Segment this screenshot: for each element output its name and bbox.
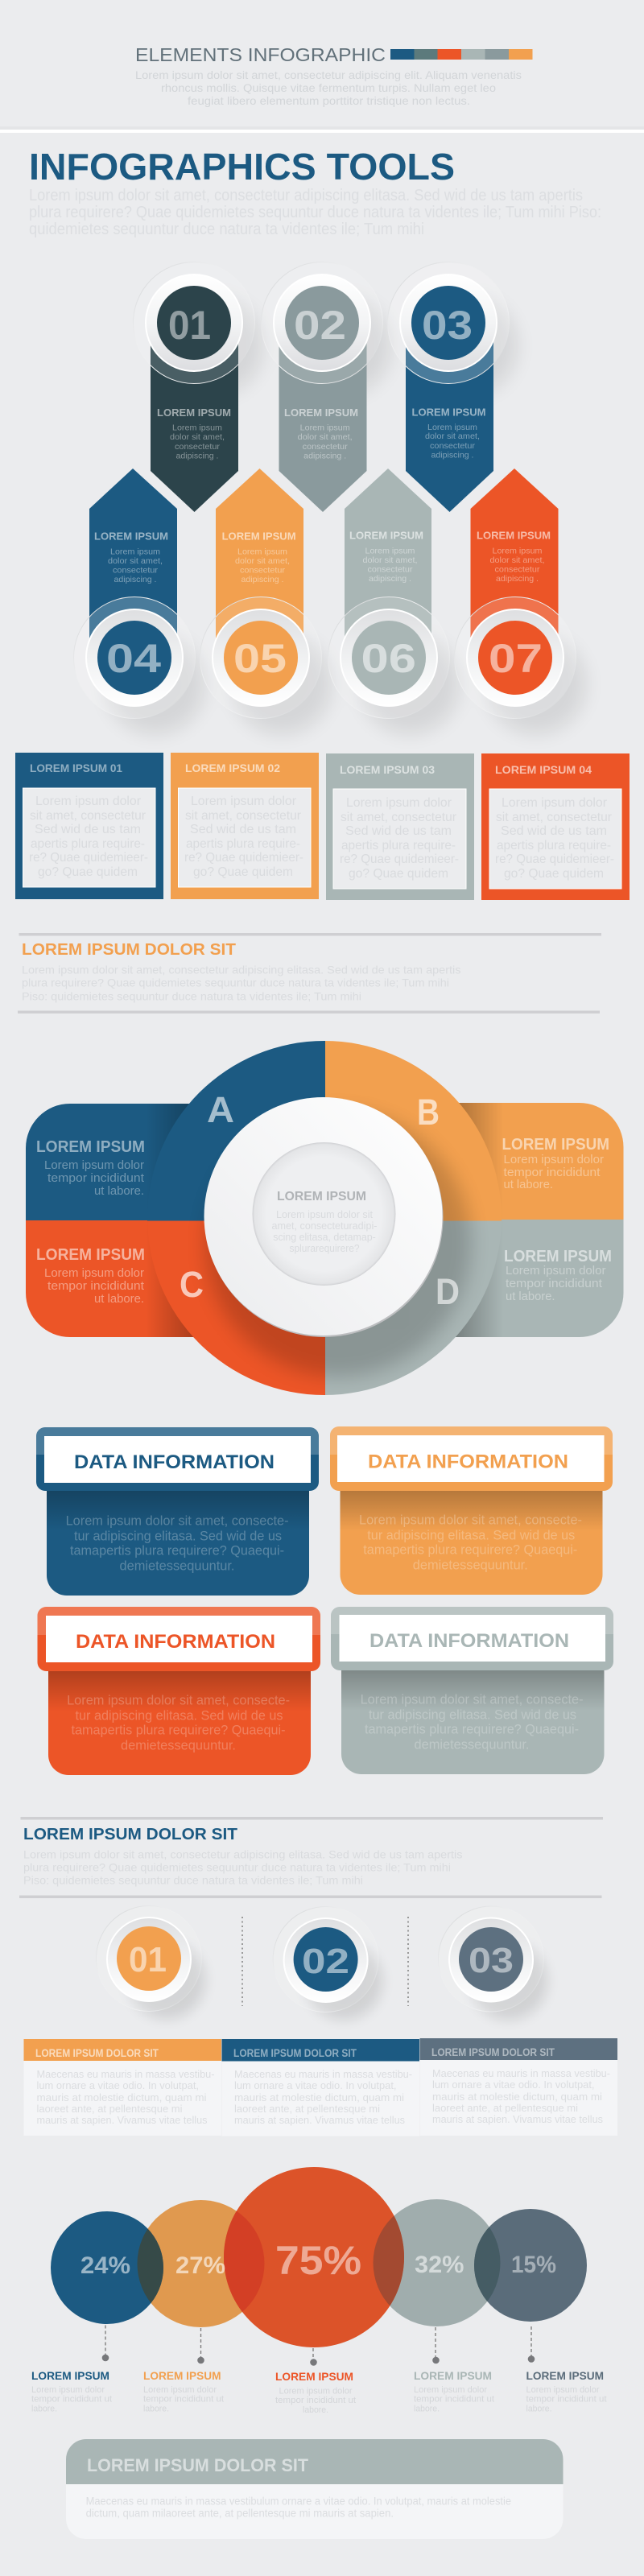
grey panel text xyxy=(504,1248,612,1303)
quadrant letters: A xyxy=(207,1089,234,1130)
chart: seven numbered ribbons xyxy=(74,262,586,734)
card 04: re? Quae quidemieer- xyxy=(495,852,614,866)
quadrant letters: C xyxy=(180,1264,204,1305)
data card: red: tamapertis plura requirere? Quaequi- xyxy=(71,1723,285,1737)
blue panel text: ut labore. xyxy=(94,1185,144,1198)
data card: orange: Lorem ipsum dolor sit amet, consecte- xyxy=(359,1512,582,1528)
card 04: go? Quae quidem xyxy=(504,867,604,881)
label 24%: Lorem ipsum dolor xyxy=(31,2385,105,2395)
card 01: LOREM IPSUM 01 xyxy=(30,762,122,774)
orange section paragraph: plura requirere? Quae quidemietes sequuntur duce natura ta videntes ile; Tum mihi xyxy=(22,976,449,989)
circle 02 xyxy=(273,1906,378,2013)
column 1 xyxy=(24,2039,221,2136)
column 2: Maecenas eu mauris in massa vestibu- xyxy=(234,2068,412,2080)
blue section paragraph: Lorem ipsum dolor sit amet, consectetur adipiscing elitasa. Sed wid de us tam apertis xyxy=(23,1848,462,1861)
column 3: mauris at sapien. Vivamus vitae tellus xyxy=(432,2113,603,2125)
label 24%: LOREM IPSUM xyxy=(31,2369,109,2382)
callout text: Maecenas eu mauris in massa vestibulum ornare a vitae odio. In volutpat, mauris at molestie xyxy=(86,2496,511,2507)
data card: red: demietessequuntur. xyxy=(121,1737,236,1753)
card 04: apertis plura require- xyxy=(497,839,611,852)
ribbon 04: 04 xyxy=(106,636,161,681)
ribbon 05: Lorem ipsum xyxy=(237,547,287,557)
intro paragraph xyxy=(29,187,601,238)
label 32%: tempor incididunt ut xyxy=(414,2394,494,2404)
card 03: LOREM IPSUM 03 xyxy=(340,763,435,776)
orange section paragraph: Piso: quidemietes sequuntur duce natura ta videntes ile; Tum mihi xyxy=(22,990,361,1003)
card 01 xyxy=(15,753,163,899)
data card: orange: tur adipiscing elitasa. Sed wid de us xyxy=(367,1528,575,1542)
data card: orange xyxy=(330,1426,613,1595)
label 24%: labore. xyxy=(31,2404,57,2413)
centre disc: Lorem ipsum dolor sit xyxy=(276,1209,374,1220)
label 27%: Lorem ipsum dolor xyxy=(143,2385,217,2395)
intro paragraph: Lorem ipsum dolor sit amet, consectetur adipiscing elitasa. Sed wid de us tam apertis xyxy=(29,187,583,204)
blue section paragraph: plura requirere? Quae quidemietes sequuntur duce natura ta videntes ile; Tum mihi xyxy=(23,1861,451,1874)
ribbon 02: Lorem ipsum xyxy=(300,423,350,433)
data card: blue: tamapertis plura requirere? Quaequi- xyxy=(70,1542,284,1558)
ribbon 04: dolor sit amet, xyxy=(108,556,163,566)
blue section paragraph xyxy=(23,1848,462,1887)
grey panel text: LOREM IPSUM xyxy=(504,1248,612,1265)
table: three columns xyxy=(24,2038,617,2136)
label 15% xyxy=(526,2369,607,2413)
ribbon 03: adipiscing . xyxy=(431,451,473,460)
card 01: go? Quae quidem xyxy=(38,865,138,879)
blue section paragraph: Piso: quidemietes sequuntur duce natura ta videntes ile; Tum mihi xyxy=(23,1874,363,1887)
ribbon 02: 02 xyxy=(294,303,346,348)
panel: four lorem ipsum cards xyxy=(15,753,630,900)
label 75%: LOREM IPSUM xyxy=(275,2370,353,2383)
percentage values: 32% xyxy=(415,2252,464,2278)
quadrant letters xyxy=(180,1089,460,1312)
ribbon 03: consectetur xyxy=(430,441,476,451)
circle 03 xyxy=(438,1906,544,2012)
data card: red: DATA INFORMATION xyxy=(76,1631,275,1653)
label 75% xyxy=(275,2370,356,2415)
ribbon 07: LOREM IPSUM xyxy=(477,530,551,541)
orange section paragraph: Lorem ipsum dolor sit amet, consectetur adipiscing elitasa. Sed wid de us tam apertis xyxy=(22,963,460,976)
card 02: LOREM IPSUM 02 xyxy=(185,762,280,774)
card 02: apertis plura require- xyxy=(186,837,300,851)
colour swatch strip xyxy=(390,49,533,60)
ribbon 05: dolor sit amet, xyxy=(235,556,290,566)
ribbon 03: Lorem ipsum xyxy=(427,423,477,432)
card 01: Lorem ipsum dolor xyxy=(35,795,142,808)
data card: blue: Lorem ipsum dolor sit amet, consecte- xyxy=(66,1513,289,1528)
data card: blue: DATA INFORMATION xyxy=(74,1451,275,1473)
orange panel text: Lorem ipsum dolor xyxy=(504,1154,604,1166)
ribbon 06: consectetur xyxy=(367,565,413,575)
red panel text xyxy=(36,1246,145,1306)
percentage values: 24% xyxy=(80,2252,130,2279)
ribbon 06: adipiscing . xyxy=(369,574,411,584)
ribbon 04: Lorem ipsum xyxy=(110,547,160,557)
ribbon 05 xyxy=(200,469,322,718)
centre disc xyxy=(204,1097,443,1337)
red panel text: tempor incididunt xyxy=(47,1280,144,1293)
label 32% xyxy=(414,2369,494,2413)
orange panel text: tempor incididunt xyxy=(504,1166,601,1179)
leader lines xyxy=(102,2325,535,2366)
column 3: laoreet ante, at pellentesque mi xyxy=(432,2102,578,2114)
centre disc: amet, consecteturadipi- xyxy=(272,1220,377,1232)
section heading: orange xyxy=(22,941,460,1003)
red panel text: LOREM IPSUM xyxy=(36,1246,145,1264)
data card: orange: DATA INFORMATION xyxy=(368,1451,568,1473)
ribbon 03: LOREM IPSUM xyxy=(412,406,486,419)
ribbon 03 xyxy=(388,262,509,512)
orange panel text xyxy=(502,1136,609,1191)
percentage values xyxy=(80,2238,556,2283)
card 02 xyxy=(171,753,319,899)
callout text xyxy=(86,2496,511,2520)
section heading: blue xyxy=(23,1826,462,1887)
data card: blue xyxy=(36,1427,319,1596)
ribbon 02 xyxy=(261,262,383,512)
numbered circles row xyxy=(97,1906,547,2020)
column 2: lum ornare a vitae odio. In volutpat, xyxy=(234,2079,396,2091)
side panel: orange xyxy=(402,1103,623,1220)
ribbon 06: LOREM IPSUM xyxy=(349,530,423,541)
ribbon 04 xyxy=(74,469,195,718)
column 3 xyxy=(420,2038,617,2136)
card 02: sit amet, consectetur xyxy=(185,809,302,823)
circle 01: 01 xyxy=(129,1940,167,1979)
ribbon 02: consectetur xyxy=(303,442,348,452)
column 1: mauris at molestie dictum, quam mi xyxy=(37,2091,207,2103)
label 32%: Lorem ipsum dolor xyxy=(414,2385,487,2395)
column 2: mauris at sapien. Vivamus vitae tellus xyxy=(234,2114,405,2126)
ribbon 04: adipiscing . xyxy=(114,575,156,584)
ribbon 01: consectetur xyxy=(175,442,221,452)
data card: grey xyxy=(331,1607,613,1774)
label 27%: labore. xyxy=(143,2404,169,2413)
card 01: sit amet, consectetur xyxy=(30,809,147,823)
header description: Lorem ipsum dolor sit amet, consectetur adipiscing elit. Aliquam venenatis xyxy=(135,69,522,81)
column 2 xyxy=(222,2039,419,2136)
chart: ABCD wheel xyxy=(26,1038,623,1397)
ribbon 06: 06 xyxy=(361,636,416,681)
centre disc: splurarequirere? xyxy=(290,1243,360,1254)
label 15%: labore. xyxy=(526,2404,552,2413)
column 2: laoreet ante, at pellentesque mi xyxy=(234,2103,380,2115)
ribbon 06 xyxy=(328,469,449,718)
percentage values: 27% xyxy=(175,2252,225,2279)
ribbon 01: LOREM IPSUM xyxy=(157,407,231,419)
ribbon 07: consectetur xyxy=(494,565,540,575)
data card: grey: demietessequuntur. xyxy=(414,1737,530,1752)
ribbon 05: 05 xyxy=(233,636,287,681)
ribbon 07 xyxy=(454,469,576,718)
label 32%: LOREM IPSUM xyxy=(414,2369,492,2382)
column 2: mauris at molestie dictum, quam mi xyxy=(234,2091,404,2103)
label 27% xyxy=(143,2369,224,2413)
main title: INFOGRAPHICS TOOLS xyxy=(29,146,455,188)
ribbon 01: adipiscing . xyxy=(175,451,219,460)
circle 01 xyxy=(97,1906,201,2011)
card 03 xyxy=(326,753,474,900)
data card: blue: tur adipiscing elitasa. Sed wid de us xyxy=(74,1528,282,1544)
header title: ELEMENTS INFOGRAPHIC xyxy=(135,44,386,65)
callout title: LOREM IPSUM DOLOR SIT xyxy=(87,2455,309,2475)
card 04: LOREM IPSUM 04 xyxy=(495,763,592,776)
label 32%: labore. xyxy=(414,2404,440,2413)
card 03: Lorem ipsum dolor xyxy=(346,796,452,810)
circle 02: 02 xyxy=(302,1942,349,1981)
ribbon 02: LOREM IPSUM xyxy=(284,407,358,419)
red panel text: ut labore. xyxy=(94,1293,144,1306)
ribbon 03: dolor sit amet, xyxy=(425,431,480,441)
grey panel text: ut labore. xyxy=(506,1290,555,1303)
label 75%: tempor incididunt ut xyxy=(275,2396,356,2405)
column 3: LOREM IPSUM DOLOR SIT xyxy=(431,2046,555,2058)
circles xyxy=(51,2167,587,2347)
label 75%: labore. xyxy=(303,2405,328,2415)
data card: red: Lorem ipsum dolor sit amet, consecte- xyxy=(67,1692,290,1708)
header description: rhoncus mollis. Quisque vitae fermentum turpis. Nullam eget leo xyxy=(161,82,496,94)
label 27%: tempor incididunt ut xyxy=(143,2394,224,2404)
column 1: lum ornare a vitae odio. In volutpat, xyxy=(37,2079,199,2091)
grey panel text: tempor incididunt xyxy=(506,1278,602,1290)
label 75%: Lorem ipsum dolor xyxy=(279,2386,353,2396)
orange panel text: LOREM IPSUM xyxy=(502,1136,609,1154)
red panel text: Lorem ipsum dolor xyxy=(44,1267,144,1280)
header description xyxy=(135,69,522,107)
data card: grey: Lorem ipsum dolor sit amet, consecte- xyxy=(361,1692,584,1707)
circle 03: 03 xyxy=(469,1941,514,1980)
ribbon 05: LOREM IPSUM xyxy=(222,530,296,543)
chart: overlapping percentage circles xyxy=(31,2167,607,2415)
card 02: go? Quae quidem xyxy=(193,865,293,879)
card 02: re? Quae quidemieer- xyxy=(184,851,303,865)
quadrant letters: D xyxy=(436,1271,460,1312)
blue panel text: Lorem ipsum dolor xyxy=(44,1159,144,1172)
label 15%: Lorem ipsum dolor xyxy=(526,2385,600,2395)
card 01: apertis plura require- xyxy=(31,837,145,851)
blue panel text: tempor incididunt xyxy=(47,1172,144,1185)
card 01: re? Quae quidemieer- xyxy=(29,851,148,865)
data card: blue: demietessequuntur. xyxy=(119,1558,235,1573)
label 27%: LOREM IPSUM xyxy=(143,2369,221,2382)
column 2: LOREM IPSUM DOLOR SIT xyxy=(233,2046,357,2059)
data card: grey: tamapertis plura requirere? Quaequi- xyxy=(365,1721,579,1737)
intro paragraph: quidemietes sequuntur duce natura ta videntes ile; Tum mihi xyxy=(29,221,424,238)
centre disc: LOREM IPSUM xyxy=(277,1190,366,1203)
main heading block xyxy=(29,146,601,238)
data card: orange: demietessequuntur. xyxy=(413,1557,528,1573)
ribbon 07: adipiscing . xyxy=(496,574,539,584)
side panel: red xyxy=(26,1220,242,1337)
orange section paragraph xyxy=(22,963,460,1003)
percentage values: 75% xyxy=(275,2238,361,2283)
card 04 xyxy=(481,753,630,900)
label 15%: tempor incididunt ut xyxy=(526,2394,607,2404)
orange heading: LOREM IPSUM DOLOR SIT xyxy=(22,941,236,959)
data card: red xyxy=(37,1607,320,1775)
label 24% xyxy=(31,2369,112,2413)
wheel quadrants xyxy=(145,1038,506,1397)
column 1: mauris at sapien. Vivamus vitae tellus xyxy=(37,2114,208,2126)
panel: bottom callout card xyxy=(66,2439,564,2539)
card 03: go? Quae quidem xyxy=(349,867,448,881)
grey panel text: Lorem ipsum dolor xyxy=(506,1265,606,1278)
card 03: re? Quae quidemieer- xyxy=(340,852,459,866)
blue panel text xyxy=(36,1138,145,1198)
card 03: apertis plura require- xyxy=(341,839,456,852)
side panel: grey xyxy=(402,1220,623,1337)
ribbon 02: adipiscing . xyxy=(303,451,346,460)
panel: data information cards xyxy=(36,1426,613,1775)
card 04: sit amet, consectetur xyxy=(496,811,613,824)
card 02: Lorem ipsum dolor xyxy=(191,795,297,808)
column 3: lum ornare a vitae odio. In volutpat, xyxy=(432,2079,594,2091)
quadrant letters: B xyxy=(417,1092,440,1133)
card 03: sit amet, consectetur xyxy=(341,811,457,824)
ribbon 01 xyxy=(134,262,254,512)
blue panel text: LOREM IPSUM xyxy=(36,1138,145,1156)
ribbon 07: 07 xyxy=(489,636,543,681)
ribbon 02: dolor sit amet, xyxy=(298,432,353,442)
data card: red: tur adipiscing elitasa. Sed wid de us xyxy=(76,1708,283,1723)
ribbon 06: dolor sit amet, xyxy=(362,555,417,565)
ribbon 05: consectetur xyxy=(240,565,286,575)
blue heading: LOREM IPSUM DOLOR SIT xyxy=(23,1826,237,1843)
orange panel text: ut labore. xyxy=(504,1179,553,1191)
data card: grey: tur adipiscing elitasa. Sed wid de us xyxy=(369,1707,576,1723)
ribbon 04: consectetur xyxy=(113,565,159,575)
card 02: Sed wid de us tam xyxy=(190,823,296,836)
ribbon 01: 01 xyxy=(168,303,211,348)
ribbon 06: Lorem ipsum xyxy=(365,546,415,555)
ribbon 01: Lorem ipsum xyxy=(172,423,222,433)
ribbon 03: 03 xyxy=(422,303,473,348)
card 04: Sed wid de us tam xyxy=(501,824,607,838)
centre disc: scing elitasa, detamap- xyxy=(273,1232,376,1243)
card 03: Sed wid de us tam xyxy=(345,824,452,838)
column 1: Maecenas eu mauris in massa vestibu- xyxy=(37,2068,214,2080)
ribbon 04: LOREM IPSUM xyxy=(94,530,168,543)
label 24%: tempor incididunt ut xyxy=(31,2394,112,2404)
side panel: blue xyxy=(26,1104,242,1220)
ribbon 07: dolor sit amet, xyxy=(489,555,544,565)
data card: grey: DATA INFORMATION xyxy=(369,1630,569,1652)
label 15%: LOREM IPSUM xyxy=(526,2369,604,2382)
intro paragraph: plura requirere? Quae quidemietes sequuntur duce natura ta videntes ile; Tum mihi Piso: xyxy=(29,204,601,221)
column 1: LOREM IPSUM DOLOR SIT xyxy=(35,2046,159,2059)
data card: orange: tamapertis plura requirere? Quaequi- xyxy=(363,1542,577,1557)
header description: feugiat libero elementum porttitor tristique non lectus. xyxy=(188,95,470,107)
callout text: dictum, quam milaoreet ante, at pellentesque mi mauris at sapien. xyxy=(86,2507,394,2520)
ribbon 07: Lorem ipsum xyxy=(493,546,543,555)
ribbon 05: adipiscing . xyxy=(242,575,283,584)
card 04: Lorem ipsum dolor xyxy=(502,796,608,810)
column 3: Maecenas eu mauris in massa vestibu- xyxy=(432,2067,610,2079)
percentage values: 15% xyxy=(511,2252,556,2278)
column 3: mauris at molestie dictum, quam mi xyxy=(432,2091,602,2103)
card 01: Sed wid de us tam xyxy=(35,823,141,836)
ribbon 01: dolor sit amet, xyxy=(170,432,225,442)
header: elements infographic xyxy=(135,44,533,107)
column 1: laoreet ante, at pellentesque mi xyxy=(37,2103,183,2115)
